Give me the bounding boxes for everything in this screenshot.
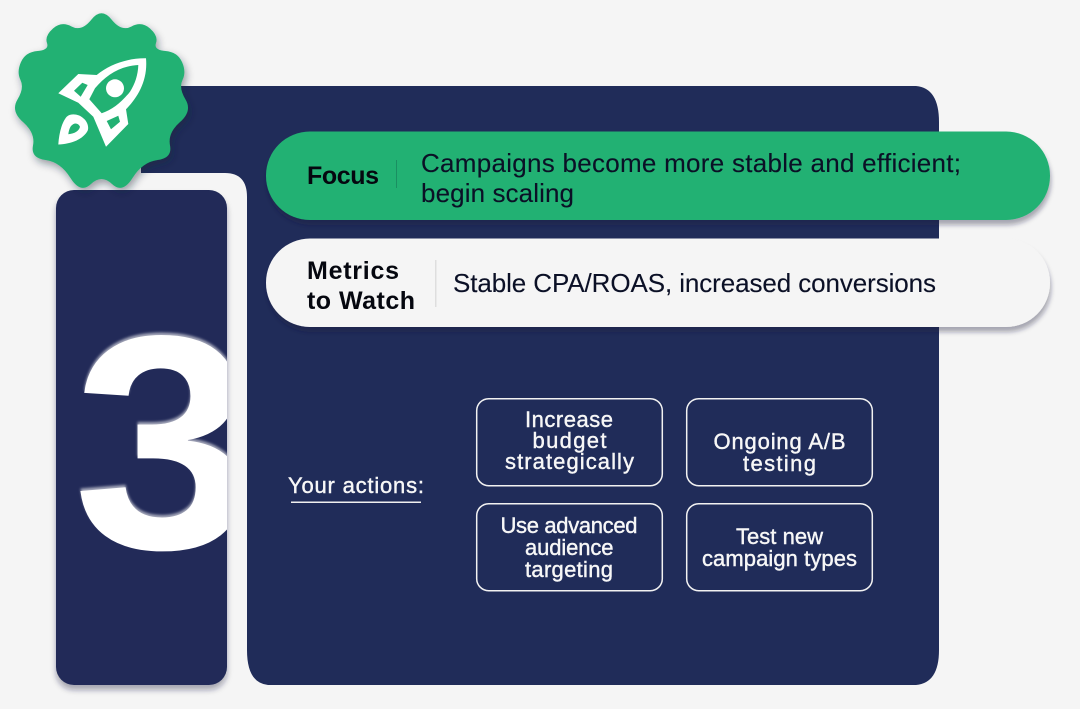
action: increase budget strategically: strategically	[505, 449, 634, 474]
action: use advanced audience targeting: audience	[525, 535, 614, 560]
metrics label: to Watch	[307, 287, 415, 315]
action: use advanced audience targeting: targeting	[525, 557, 613, 582]
pill: metrics to watch	[266, 238, 1050, 327]
action: use advanced audience targeting	[477, 504, 662, 591]
focus description: Campaigns become more stable and efficient;	[421, 148, 961, 178]
action: ongoing A/B testing: Ongoing A/B	[714, 429, 846, 454]
focus label: Focus	[307, 162, 379, 190]
action: increase budget strategically: Increase	[525, 407, 613, 432]
action: test new campaign types: Test new	[736, 524, 823, 549]
big number 3: 3	[73, 271, 253, 613]
badge: green scalloped seal	[15, 13, 188, 188]
icon: rocket	[58, 58, 146, 147]
action: increase budget strategically: budget	[532, 428, 606, 453]
your actions heading: Your actions:	[288, 473, 424, 498]
action: ongoing A/B testing: testing	[743, 451, 816, 476]
metrics label	[307, 257, 415, 315]
panel: main navy background	[141, 86, 939, 685]
metrics description: Stable CPA/ROAS, increased conversions	[453, 268, 936, 298]
panel: number column	[56, 190, 227, 685]
action: test new campaign types	[687, 504, 872, 591]
action: use advanced audience targeting: Use advanced	[500, 513, 638, 538]
focus description: begin scaling	[421, 178, 574, 208]
action: ongoing A/B testing	[687, 399, 872, 486]
action: increase budget strategically	[477, 399, 662, 486]
action: test new campaign types: campaign types	[702, 546, 857, 571]
metrics label: Metrics	[307, 257, 399, 285]
pill: focus	[266, 132, 1050, 220]
focus description	[421, 148, 961, 208]
